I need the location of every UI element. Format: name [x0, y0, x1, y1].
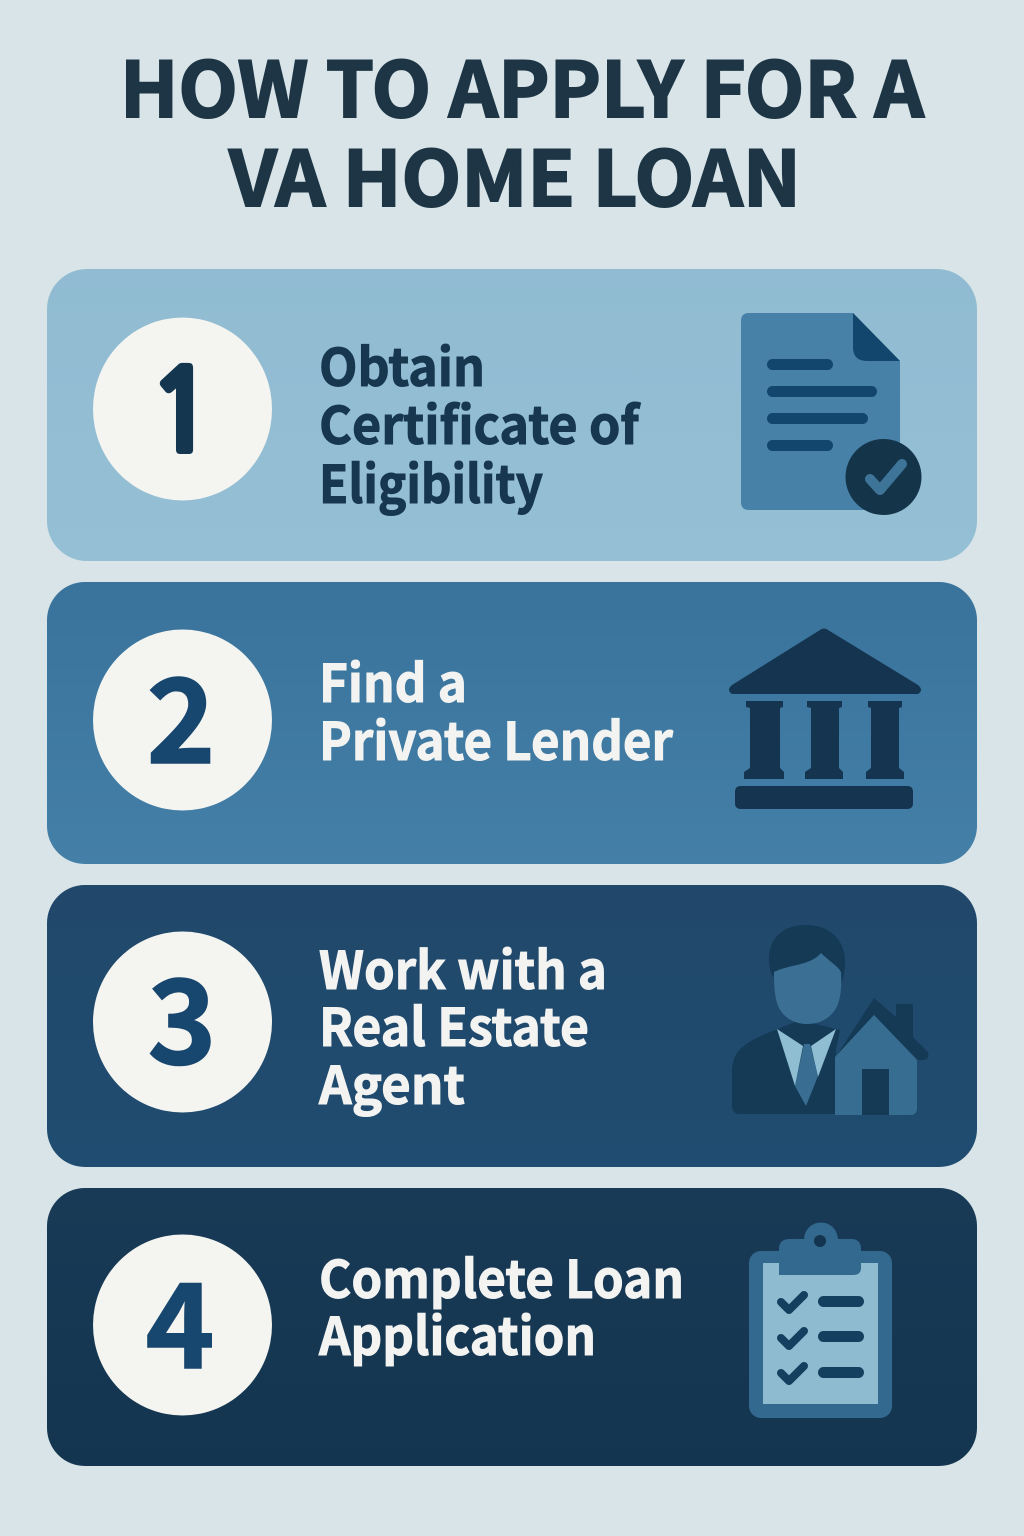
- step 1 label: [319, 326, 642, 518]
- step 2 number badge: 2: [146, 627, 216, 797]
- icon: agent with house: [732, 925, 928, 1115]
- step 1 number badge: [93, 318, 272, 500]
- step 3 number badge: [93, 928, 272, 1112]
- panel: step 2: [47, 582, 977, 864]
- step 1 label: Certificate of: [319, 384, 642, 459]
- step 4 label: [318, 1238, 684, 1370]
- step 4 label: Complete Loan: [319, 1238, 684, 1313]
- panel: step 4: [47, 1188, 977, 1466]
- step 3 label: [318, 929, 607, 1119]
- step 1 number badge: 1: [148, 356, 216, 468]
- step 1 label: Obtain: [319, 326, 485, 401]
- title: [120, 29, 925, 228]
- title: VA HOME LOAN: [228, 118, 801, 228]
- panel: step 3: [47, 885, 977, 1167]
- icon: clipboard checklist: [749, 1222, 892, 1418]
- step 2 label: Private Lender: [319, 700, 673, 775]
- step 3 label: Agent: [318, 1044, 465, 1119]
- step 2 label: [319, 642, 673, 775]
- icon: document with check: [741, 313, 922, 515]
- panel: step 1: [47, 269, 977, 561]
- step 3 label: Real Estate: [319, 986, 589, 1061]
- title: HOW TO APPLY FOR A: [120, 29, 925, 139]
- step 3 label: Work with a: [319, 929, 607, 1004]
- icon: bank building: [729, 628, 921, 809]
- step 2 number badge: [93, 627, 272, 810]
- step 1 label: Eligibility: [319, 443, 543, 518]
- step 4 number badge: [93, 1232, 272, 1416]
- step 4 number badge: 4: [145, 1232, 215, 1402]
- step 4 label: Application: [318, 1295, 596, 1370]
- step 3 number badge: 3: [147, 928, 217, 1098]
- step 2 label: Find a: [319, 642, 467, 717]
